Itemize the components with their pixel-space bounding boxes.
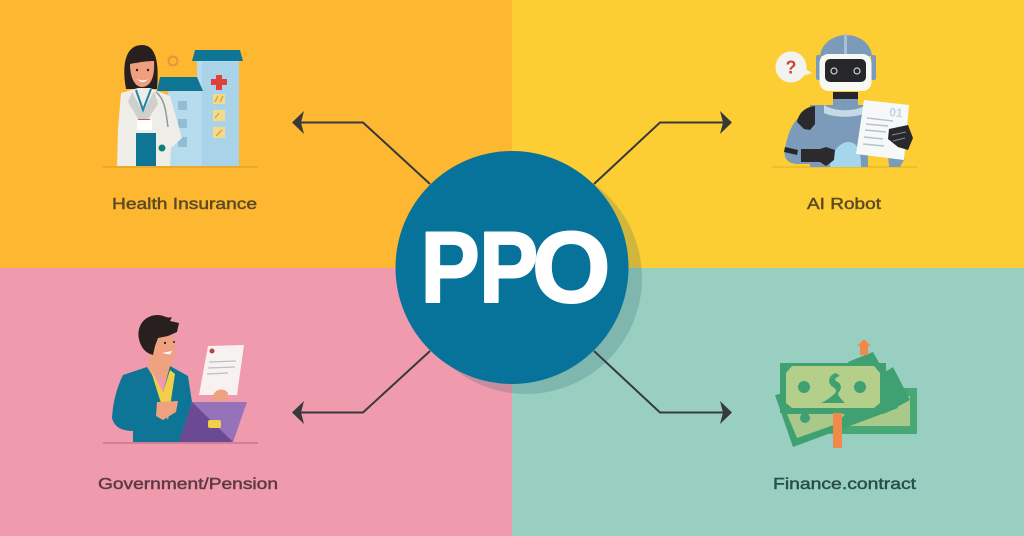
center circle: PPO: P — [479, 212, 538, 324]
speech bubble: ? — [786, 58, 796, 78]
briefcase — [179, 402, 247, 442]
label: Health Insurance: Health Insurance — [112, 196, 257, 213]
label: Government/Pension: Government/Pension — [98, 476, 278, 493]
panel: government/pension background — [0, 268, 512, 536]
panel: AI robot background — [512, 0, 1024, 268]
icon: banknotes with arrow — [775, 339, 917, 448]
panel: health insurance background — [0, 0, 512, 268]
arrow: to finance contract — [594, 351, 732, 424]
arrow: to health insurance — [292, 111, 430, 184]
speech bubble — [776, 52, 812, 82]
icon: doctor and hospital — [103, 45, 258, 168]
paper: 01 — [889, 105, 904, 120]
center circle: PPO: O — [532, 212, 611, 324]
icon: robot with paper — [772, 34, 917, 168]
document — [199, 345, 244, 395]
center circle: PPO: P — [420, 212, 480, 324]
center circle: PPO — [396, 151, 628, 384]
arrow: to government/pension — [292, 351, 430, 424]
panel: finance contract background — [512, 268, 1024, 536]
growth arrow — [833, 339, 871, 448]
paper — [856, 100, 909, 160]
center circle shadow — [410, 162, 642, 394]
label: Finance.contract: Finance.contract — [773, 476, 917, 493]
arrow: to AI robot — [594, 111, 732, 184]
icon: official with document and briefcase — [103, 315, 258, 444]
label: AI Robot: AI Robot — [807, 196, 882, 213]
